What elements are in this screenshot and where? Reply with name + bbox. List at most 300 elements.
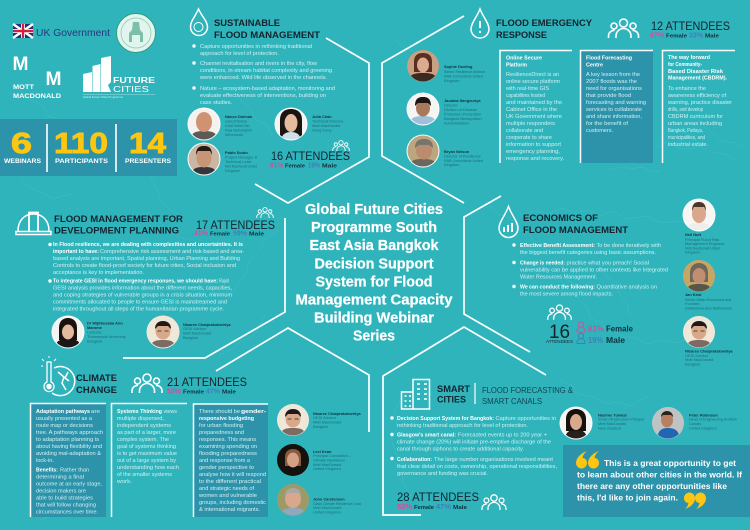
speaker: Janaina Sangsuriya: Administration: [444, 120, 469, 126]
text panel: systems thinking: Systems Thinking: [117, 409, 162, 415]
text panel: gender-responsive budgeting: flooding preparedness: [199, 451, 257, 457]
speaker: Bryan Nelson: Director of Resilience: [444, 154, 481, 158]
speaker: Neil Nutt: Neil Nutt: [685, 232, 702, 237]
title: [296, 202, 452, 344]
text block: bullets: In Flood resilience, we are dealing with complexities and uncertainties. It is: [53, 242, 243, 248]
text block: bullets: Controls to create flood-proof society for future cities, Social inclusion and: [53, 263, 236, 269]
attendees: 28: 53%: [397, 504, 413, 511]
heading: [496, 17, 593, 40]
attendees: 16 with gender split: 16: [549, 322, 570, 343]
text block: bullets: acceptance is key to implementation.: [53, 270, 144, 276]
icon: closing quote: [684, 492, 706, 509]
speaker: John Carstensen: John Carstensen: [313, 496, 345, 502]
speaker: Sophie Dueling: Kingdom: [444, 78, 459, 83]
text block: bullets: Water Resources Management.: [520, 274, 597, 280]
text panel: systems thinking: understanding how each: [117, 465, 179, 471]
text panel: gender-responsive budgeting: There should be: [199, 409, 240, 415]
text panel: systems thinking: out of a large system by: [117, 458, 176, 464]
text panel: adaptation pathways: to adaptation planning is: [36, 437, 99, 443]
icon: opening quote: [576, 451, 599, 468]
text panel: the way forward: drills, and develop: [668, 107, 703, 113]
stat: webinars: 6: [11, 128, 32, 160]
speaker: John Carstensen: [277, 484, 361, 516]
heading: FLOOD EMERGENCY: [496, 17, 593, 28]
heading: CLIMATE: [76, 372, 117, 383]
text panel: gender-responsive budgeting: analyse how it will respond: [199, 472, 266, 478]
attendees: 28: 28 ATTENDEES: [397, 492, 479, 504]
speaker: Sophie Dueling: RAB Consultants United: [444, 74, 483, 78]
text panel: online secure platform: cooperate to share: [506, 135, 552, 141]
logo: Future Cities: FUTURE: [113, 76, 156, 85]
text panel: the way forward: Based Disaster Risk: [668, 69, 723, 75]
speaker: Nasrine Tomasi: Mott MacDonald: [598, 421, 626, 426]
text panel: online secure platform: [500, 50, 572, 163]
stat: webinars: [4, 128, 42, 165]
speaker: Nanco Dolman: Leading Professional: [225, 118, 247, 124]
speaker: Julia Chan: Julia Chan: [312, 114, 332, 119]
speaker: Julia Chan: [274, 108, 344, 140]
speaker: Janaina Sangsuriya: Protection Prevention: [444, 112, 481, 116]
text panel: adaptation pathways: route map or decisions: [36, 423, 93, 429]
speaker: Lexi Kean: Climate Resilience: [313, 458, 345, 462]
text panel: the way forward: warning, practice disaster: [667, 100, 732, 106]
speaker: Janaina Sangsuriya: Janaina Sangsuriya: [444, 98, 481, 103]
text panel: the way forward: CBDRM curriculum for: [668, 114, 723, 120]
text panel: online secure platform: ResilienceDirect is an: [506, 72, 559, 78]
speaker: Julia Chan: Technical Director,: [312, 118, 344, 124]
callout: quote: [563, 445, 750, 517]
speaker: Nisaree Chaiprakobwiriya: GESI Advisor: [183, 326, 207, 331]
logo: city seal: [116, 14, 156, 52]
text panel: systems thinking: multiple dispersed,: [117, 416, 165, 422]
speaker: John Carstensen: Mott MacDonald: [313, 505, 341, 510]
attendees: 16: Female: [285, 164, 305, 170]
text block: bullets: practice what you preach! Social: [566, 260, 649, 266]
text panel: online secure platform: capabilities hosted: [506, 93, 545, 99]
icon: chart drop: [499, 206, 518, 238]
speaker: Sophie Dueling: [407, 50, 486, 83]
text block: bullets: Collaboration:: [397, 457, 432, 463]
speaker: Nisaree Chaiprakobwiriya: [146, 316, 231, 348]
stat: participants: 110: [54, 128, 108, 160]
text panel: gender-responsive budgeting: for urban flooding: [199, 423, 243, 429]
attendees: 16 with gender split: ATTENDEES: [546, 339, 573, 344]
text block: bullets: Capture opportunities in rethinking traditional: [200, 44, 312, 50]
speaker: Julia Chan: Hong Kong: [312, 128, 331, 132]
text panel: adaptation pathways: lock-in.: [36, 458, 54, 464]
speaker: Nisaree Chaiprakobwiriya: Bangkok: [313, 424, 328, 429]
title: Series: [353, 328, 395, 344]
subheading: [482, 385, 573, 406]
title: Decision Support: [314, 256, 434, 272]
logo: Future Cities: Global Future Cities Programme: [83, 95, 124, 99]
text panel: the way forward: urban areas including: [668, 121, 722, 127]
panel: flood management for development planning: [16, 208, 275, 348]
text panel: gender-responsive budgeting: gender perspective to: [199, 465, 254, 471]
speaker: Nanco Dolman: in Water Resilient Cities,: [225, 123, 250, 128]
logo: Mott MacDonald: [12, 54, 62, 100]
heading: [76, 372, 117, 395]
text panel: flood forecasting centre: and share information,: [586, 114, 643, 120]
speaker: Bryan Nelson: Kingdom: [444, 162, 459, 167]
speaker: Lexi Kean: United Kingdom: [313, 466, 341, 471]
speaker: Jan Kind: Senior Water Economist and: [685, 297, 731, 302]
text panel: systems thinking: of the smaller systems: [117, 472, 172, 478]
text block: bullets: evaluate effectiveness of interventions, building on: [200, 93, 326, 99]
heading: [523, 212, 628, 235]
text block: bullets: We can conduct the following:: [520, 284, 595, 290]
text panel: flood forecasting centre: that provide flood: [586, 93, 631, 99]
text panel: flood forecasting centre: services to collaborate: [586, 107, 642, 113]
speaker: Nisaree Chaiprakobwiriya: [683, 316, 733, 366]
text panel: systems thinking: goal of systems thinking: [117, 444, 176, 450]
text panel: systems thinking: as part of a larger, more: [117, 430, 176, 436]
text block: bullets: vulnerability can be applied to other contexts like Integrated: [520, 268, 668, 274]
text panel: the way forward: To enhance the: [668, 86, 706, 92]
text panel: adaptation pathways: outcome at an early stage,: [36, 482, 103, 488]
speaker: Dr Wijitbusaba Ann Marome: Thammasat University: [87, 334, 126, 339]
heading: FLOOD MANAGEMENT: [523, 224, 628, 235]
text block: bullets: Nature – ecosystem-based adaptation, monitoring and: [200, 86, 335, 92]
text panel: online secure platform: and maintained by the: [506, 100, 562, 106]
speaker: Bryan Nelson: [406, 134, 483, 168]
text panel: systems thinking: is to get maximum value: [117, 451, 177, 457]
logo: UK Government: UK Government: [36, 27, 110, 39]
attendees: 21: 53%: [167, 388, 182, 396]
speaker: Janaina Sangsuriya: Director: [444, 102, 458, 108]
speaker: Nisaree Chaiprakobwiriya: Mott MacDonald: [685, 357, 713, 362]
speaker: Dr Wijitbusaba Ann Marome: Dr Wijitbusaba Ann: [87, 320, 123, 326]
speaker: Sophie Dueling: Sophie Dueling: [444, 64, 473, 69]
logo: Future Cities: [83, 56, 156, 99]
text panel: online secure platform: emergency planning,: [506, 149, 561, 155]
text block: bullets: climate change (20%) will initiate pre-emptive discharge of the: [397, 440, 551, 446]
stat: webinars: WEBINARS: [4, 158, 42, 165]
text panel: gender-responsive budgeting: women and vulnerable: [198, 493, 257, 499]
text block: bullets: case studies.: [200, 100, 232, 106]
attendees: 21: Male: [222, 390, 236, 396]
speaker: John Carstensen: Glass Climate Resilience Lead: [313, 501, 361, 506]
speaker: Pablo Souto: Project Manager &: [225, 154, 258, 160]
text panel: adaptation pathways: Benefits:: [36, 468, 58, 474]
text panel: gender-responsive budgeting: responses. This means: [199, 437, 256, 443]
speaker: Peter Robinson: Canals: [689, 421, 701, 426]
attendees: 28: Female: [414, 505, 434, 511]
attendees: 17: Female: [210, 232, 230, 238]
text panel: adaptation pathways: Adaptation pathways: [36, 409, 90, 415]
attendees: 21: [132, 374, 247, 396]
speaker: Nisaree Chaiprakobwiriya: Mott MacDonald: [183, 330, 211, 336]
text panel: flood forecasting centre: need for organisations: [586, 86, 642, 92]
speaker: Peter Robinson: Peter Robinson: [689, 412, 718, 418]
speaker: Sophie Dueling: Senior Resilience Advisor: [444, 69, 486, 74]
text panel: flood forecasting centre: customers.: [586, 128, 613, 134]
logo: Future Cities: CITIES: [113, 85, 149, 94]
speaker: Jan Kind: Jan Kind: [685, 292, 702, 297]
speaker: Jan Kind: Deltabeheerders Netherlands: [685, 306, 732, 310]
text panel: online secure platform: Cabinet Office in the: [506, 107, 557, 113]
attendees: 12: 33%: [689, 32, 704, 40]
panel: smart cities: [390, 380, 737, 511]
text panel: gender-responsive budgeting: & international migrants.: [199, 507, 260, 513]
speaker: Nanco Dolman: [188, 108, 253, 140]
text panel: systems thinking: [112, 404, 187, 517]
icon: buildings: [402, 380, 430, 409]
speaker: Nasrine Tomasi: Nasrine Tomasi: [598, 412, 627, 418]
text panel: adaptation pathways: circumstances over time.: [36, 510, 98, 516]
text panel: gender-responsive budgeting: and response from a: [199, 458, 250, 464]
speaker: Neil Nutt: [682, 198, 725, 254]
speaker: Janaina Sangsuriya: Bangkok Metropolitan: [444, 116, 482, 121]
text block: bullets: [512, 243, 668, 298]
title: Building Webinar: [314, 310, 434, 326]
text panel: adaptation pathways: determining a final: [36, 474, 84, 480]
text panel: adaptation pathways: are: [91, 409, 100, 415]
hexagon frame lines: [123, 16, 546, 515]
subheading: FLOOD FORECASTING &: [482, 385, 573, 395]
attendees: 21: 21 ATTENDEES: [167, 377, 247, 389]
attendees: 12: 67%: [650, 32, 665, 40]
stat: participants: PARTICIPANTS: [55, 158, 109, 165]
text block: bullets: Channel revitalisation and rivers in the city, flow: [200, 61, 317, 67]
attendees: 17: Male: [249, 232, 264, 238]
text panel: systems thinking: independent systems: [117, 423, 171, 429]
attendees: 16 with gender split: Female: [606, 324, 634, 334]
text panel: gender-responsive budgeting: preparedness and: [199, 430, 244, 436]
speaker: Jan Kind: Founder,: [685, 301, 700, 306]
text panel: online secure platform: Platform: [506, 62, 527, 68]
logo: Mott MacDonald: MACDONALD: [13, 93, 61, 100]
text block: bullets: important to have:: [53, 249, 99, 255]
callout: quote: to learn about other cities in the world. If: [577, 470, 742, 480]
text panel: adaptation pathways: that will follow changing: [36, 502, 96, 508]
icon: thermometer and globe: [41, 356, 75, 396]
text panel: gender-responsive budgeting: to the different practical: [199, 479, 261, 485]
title: Programme South: [311, 220, 437, 236]
speaker: Lexi Kean: Principal Consultant –: [313, 453, 352, 458]
text panel: the way forward: awareness efficiency of: [668, 93, 727, 99]
speaker: Neil Nutt: Management Engineer,: [685, 241, 725, 246]
text panel: gender-responsive budgeting: gender-: [241, 409, 266, 415]
speaker: Nisaree Chaiprakobwiriya: Mott MacDonald: [313, 420, 341, 424]
attendees: 17: 59%: [233, 230, 248, 238]
text block: bullets: Capture opportunities in: [496, 416, 556, 422]
logo: Mott MacDonald: MOTT: [13, 84, 34, 91]
text panel: online secure platform: multiple responders: [506, 121, 555, 127]
text panel: the way forward: municipalities, and: [668, 135, 705, 141]
text panel: the way forward: Bangkok, Pattaya,: [668, 128, 703, 134]
text panel: gender-responsive budgeting: groups, including domestic: [199, 500, 266, 506]
text block: bullets: governance and funding was crucial.: [397, 471, 488, 477]
text block: bullets: Comprehensive risk assessment and risk-based and area-: [100, 249, 244, 255]
speaker: Dr Wijitbusaba Ann Marome: [52, 316, 126, 348]
attendees: 12: Male: [705, 34, 719, 40]
logo: Mott MacDonald: M: [46, 69, 62, 90]
heading: SUSTAINABLE: [214, 17, 280, 28]
speaker: Peter Robinson: Head of Engineering Scottish: [689, 416, 737, 422]
text block: bullets: rethinking traditional approach for level of protection.: [397, 423, 528, 429]
text block: bullets: [48, 242, 244, 312]
attendees: 12: 12 ATTENDEES: [651, 21, 730, 33]
speaker: Nisaree Chaiprakobwiriya: Bangkok: [183, 335, 198, 340]
speaker: Nasrine Tomasi: [560, 406, 644, 440]
text block: bullets: the biggest benefit categories using basic assumptions.: [520, 250, 656, 256]
text panel: online secure platform: response and recovery.: [506, 156, 564, 162]
heading: FLOOD MANAGEMENT FOR: [54, 213, 183, 224]
logo: Mott MacDonald: M: [12, 54, 28, 75]
stat: presenters: 14: [129, 128, 166, 160]
text panel: online secure platform: online secure platform: [506, 79, 561, 85]
title: Global Future Cities: [305, 202, 443, 218]
text panel: flood forecasting centre: 2007 floods was the: [586, 79, 637, 85]
speaker: Dr Wijitbusaba Ann Marome: Lecturer,: [87, 330, 102, 334]
text block: bullets: the most severe among flood impacts.: [520, 292, 613, 298]
speaker: Dr Wijitbusaba Ann Marome: Bangkok: [87, 338, 102, 344]
title: East Asia Bangkok: [310, 238, 439, 254]
text panel: systems thinking: complex system. The: [117, 437, 169, 443]
callout: quote: this, I'd like to join again.: [577, 492, 678, 502]
text panel: online secure platform: collaborate and: [506, 128, 543, 134]
title: Management Capacity: [296, 292, 452, 308]
panel: sustainable flood management: [188, 9, 350, 176]
panel: flood emergency response: [406, 9, 735, 168]
heading: SMART: [437, 383, 470, 394]
text panel: the way forward: for Community-: [668, 62, 702, 68]
attendees: 12: [608, 19, 730, 40]
speaker: Janaina Sangsuriya: [406, 92, 482, 126]
speaker: Peter Robinson: United Kingdom: [689, 426, 717, 430]
icon: warning drop: [471, 9, 489, 38]
stat: presenters: PRESENTERS: [125, 158, 172, 165]
text panel: adaptation pathways: decision makers are: [36, 488, 86, 494]
text panel: adaptation pathways: tree. A pathways approach: [36, 430, 103, 436]
speaker: Peter Robinson: [652, 407, 737, 439]
speaker: Pablo Souto: Mott MacDonald United: [225, 164, 257, 168]
text panel: adaptation pathways: Rather than: [60, 468, 89, 474]
heading: DEVELOPMENT PLANNING: [54, 224, 179, 236]
text block: bullets: and coping strategies of vulnerable groups in a crisis situation, minimum: [53, 292, 233, 298]
text panel: the way forward: [662, 50, 735, 163]
attendees: 16 with gender split: 81%: [588, 324, 604, 334]
speaker: Nisaree Chaiprakobwiriya: Bangkok: [685, 362, 700, 366]
speaker: Pablo Souto: Technical Lead,: [225, 159, 252, 164]
speaker: Jan Kind: [683, 260, 732, 310]
speaker: Nanco Dolman: Netherlands: [225, 132, 243, 137]
speaker: Nisaree Chaiprakobwiriya: Nisaree Chaiprakobwiriya: [313, 411, 361, 416]
speaker: Nisaree Chaiprakobwiriya: [277, 404, 361, 436]
text panel: adaptation pathways: [30, 403, 106, 517]
speaker: Pablo Souto: Kingdom: [225, 168, 240, 173]
attendees: 17: 17 ATTENDEES: [196, 220, 275, 232]
text panel: flood forecasting centre: Centre: [586, 62, 603, 68]
text block: bullets: Quantitative analysis on: [596, 284, 657, 290]
attendees: 16: Male: [322, 164, 337, 170]
text panel: adaptation pathways: able to build strategies: [36, 496, 93, 502]
text block: bullets: were enhanced. Wild life observed in the channels.: [199, 75, 327, 81]
text panel: online secure platform: information to support: [506, 142, 562, 148]
text block: bullets: Forecasted events up to 200 year +: [458, 432, 547, 438]
speaker: Lexi Kean: Lexi Kean: [313, 449, 332, 454]
speaker: Bryan Nelson: RAB Consultants United: [444, 158, 483, 163]
speaker: Pablo Souto: [188, 142, 258, 176]
text panel: adaptation pathways: about having flexibility and: [36, 444, 102, 450]
panel: climate change: [30, 356, 361, 517]
speaker: Nasrine Tomasi: New Zealand: [598, 426, 621, 430]
text panel: flood forecasting centre: Flood Forecasting: [586, 56, 632, 62]
speaker: Nisaree Chaiprakobwiriya: GESI Advisor: [313, 415, 337, 420]
attendees: 16 with gender split: [546, 305, 634, 345]
text block: bullets: [390, 416, 558, 477]
speaker: Pablo Souto: Pablo Souto: [225, 150, 248, 155]
heading: CITIES: [437, 394, 466, 404]
attendees: 28: Male: [453, 505, 467, 511]
speaker: Bryan Nelson: Bryan Nelson: [444, 149, 470, 154]
text block: bullets: that clear detail on costs, ownership, operational responsibilities,: [397, 464, 558, 470]
heading: FLOOD MANAGEMENT: [214, 29, 320, 40]
attendees: 16: [270, 141, 350, 170]
text block: bullets: approach for level of protection.: [200, 51, 279, 57]
text block: bullets: Decision Support System for Bangkok:: [397, 416, 494, 422]
callout: quote: This is a great opportunity to get: [604, 458, 736, 468]
speaker: Nisaree Chaiprakobwiriya: Nisaree Chaiprakobwiriya: [183, 322, 231, 327]
text panel: flood forecasting centre: [580, 50, 653, 163]
speaker: Lexi Kean: [277, 444, 352, 476]
icon: leaf drop: [190, 9, 208, 36]
attendees: 12: Female: [666, 34, 687, 40]
attendees: 21: Female: [183, 390, 204, 396]
speaker: Neil Nutt: Principal Flood Risk: [685, 237, 719, 242]
text block: bullets: integrated throughout all steps of the humanitarian programme cycle.: [53, 306, 224, 312]
subheading: SMART CANALS: [482, 396, 542, 406]
speaker: Nisaree Chaiprakobwiriya: Nisaree Chaiprakobwiriya: [685, 348, 733, 354]
logo: UK Government: [13, 24, 110, 39]
heading: [214, 17, 320, 40]
speaker: Julia Chan: Mott MacDonald: [312, 123, 340, 128]
text panel: gender-responsive budgeting: responsive budgeting: [199, 416, 254, 422]
text block: bullets: Effective Benefit Assessment:: [520, 243, 595, 249]
callout: quote: there are any other opportunities like: [577, 481, 727, 491]
attendees: 17: [194, 208, 275, 238]
attendees: 16 with gender split: 19%: [588, 336, 603, 345]
speaker: Nasrine Tomasi: Smart Infrastructure Principal: [598, 416, 644, 422]
text panel: gender-responsive budgeting: examining spending on: [199, 444, 257, 450]
text panel: flood forecasting centre: forecasting and warning: [586, 100, 646, 106]
speaker: Lexi Kean: Mott MacDonald: [313, 462, 341, 467]
text panel: gender-responsive budgeting: and strategic needs of: [199, 486, 255, 492]
text panel: flood forecasting centre: A key lesson from the: [586, 72, 640, 78]
speaker: Nanco Dolman: Nanco Dolman: [225, 114, 253, 119]
attendees: 16: 81%: [270, 162, 284, 170]
text panel: adaptation pathways: usually presented as a: [36, 416, 92, 422]
text block: bullets: To be done iteratively with: [596, 243, 661, 249]
text block: bullets: commitments allocated to people to ensure GESI is mainstreamed and: [53, 300, 227, 306]
speaker: Nanco Dolman: Royal HaskoningDHV: [225, 128, 252, 132]
text block: bullets: conditions, in-stream habitat complexity and greening: [200, 68, 332, 74]
text panel: systems thinking: work.: [116, 479, 132, 485]
stats band: [0, 119, 177, 176]
text panel: the way forward: industrial estate.: [668, 142, 708, 148]
text panel: flood forecasting centre: for the benefit of: [586, 121, 629, 127]
text panel: the way forward: The way forward: [668, 55, 710, 61]
text block: bullets: To integrate GESI in flood emergency responses, we should have:: [53, 278, 218, 284]
attendees: 28: [397, 492, 506, 511]
speaker: Janaina Sangsuriya: Division of Disaster: [444, 107, 478, 112]
text block: bullets: GESI analysis provides information about the different needs, capacities,: [53, 286, 233, 292]
text panel: online secure platform: with real-time GIS: [505, 86, 549, 92]
heading: ECONOMICS OF: [523, 212, 598, 223]
heading: RESPONSE: [496, 29, 547, 40]
text block: bullets: Glasgow's smart canal:: [397, 432, 456, 438]
